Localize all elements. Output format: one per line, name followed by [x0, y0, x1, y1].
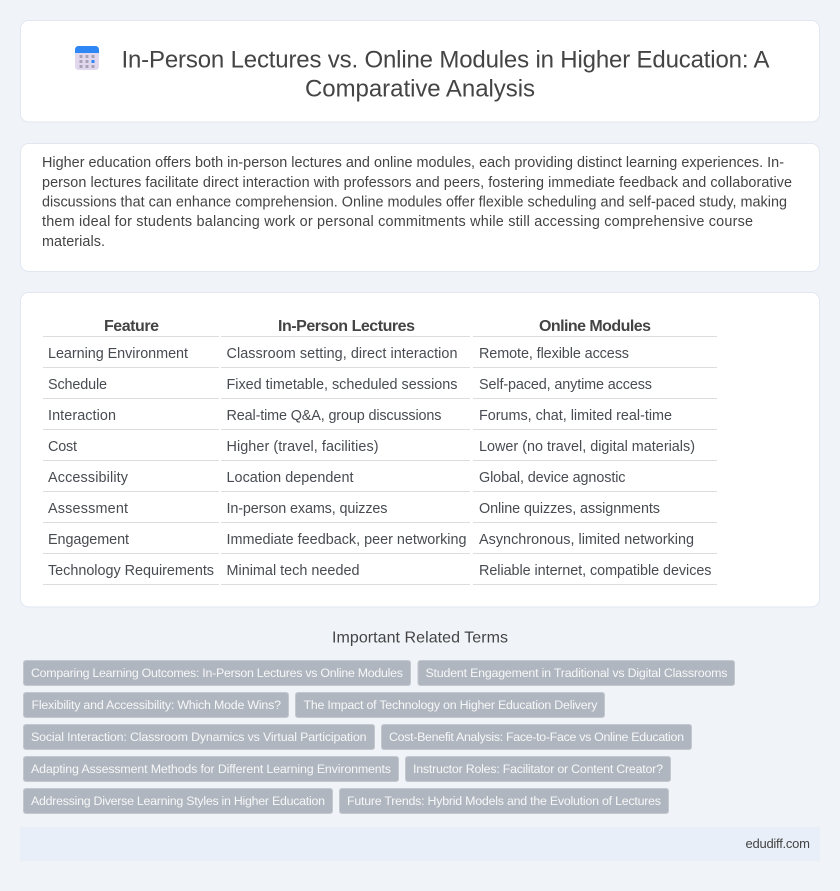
text block: introduction paragraph: Higher education offers both in-person lectures and online modules, each providing distinct learning experiences. In-: [42, 155, 784, 171]
row: technology requirements: Technology Requirements: [48, 563, 214, 579]
row: schedule: Fixed timetable, scheduled sessions: [226, 377, 458, 393]
text block: introduction paragraph: discussions that can enhance comprehension. Online modules offer flexible scheduling and self-paced study, making: [42, 194, 787, 210]
row: interaction: Real-time Q&A, group discussions: [226, 408, 442, 424]
row: schedule: [48, 377, 652, 393]
tag: Student Engagement in Traditional vs Digital Classrooms: [426, 666, 728, 680]
row: technology requirements: Reliable internet, compatible devices: [479, 563, 712, 579]
tag: [24, 692, 288, 718]
row: accessibility: [48, 470, 626, 486]
footer: [20, 827, 820, 861]
row: interaction: Forums, chat, limited real-time: [479, 408, 672, 424]
tag: Cost-Benefit Analysis: Face-to-Face vs Online Education: [389, 730, 684, 744]
row: cost: Higher (travel, facilities): [226, 439, 378, 455]
text block: introduction paragraph: them ideal for students balancing work or personal commitments while still accessing comprehensive course: [42, 214, 753, 230]
tag: Social Interaction: Classroom Dynamics vs Virtual Participation: [31, 730, 367, 744]
text block: introduction paragraph: [42, 155, 792, 250]
row: accessibility: Location dependent: [226, 470, 354, 486]
row: schedule: Self-paced, anytime access: [479, 377, 652, 393]
tag: [24, 788, 332, 814]
footer: edudiff.com: [746, 836, 810, 851]
tag: Future Trends: Hybrid Models and the Evolution of Lectures: [347, 794, 661, 808]
tag: Comparing Learning Outcomes: In-Person Lectures vs Online Modules: [31, 666, 403, 680]
row: learning environment: Classroom setting, direct interaction: [226, 346, 458, 362]
tag: [418, 660, 734, 686]
title: [122, 46, 770, 102]
row: technology requirements: [48, 563, 712, 579]
row: accessibility: Accessibility: [48, 470, 129, 486]
tag: [24, 756, 398, 782]
row: assessment: [48, 501, 660, 517]
row: assessment: In-person exams, quizzes: [226, 501, 388, 517]
row: interaction: Interaction: [48, 408, 116, 424]
icon: calendar: [75, 46, 99, 70]
text block: introduction paragraph: materials.: [42, 234, 105, 250]
row: schedule: Schedule: [48, 377, 107, 393]
tag: [406, 756, 670, 782]
title: Comparative Analysis: [305, 76, 535, 102]
panel: header: [20, 20, 820, 122]
row: cost: Cost: [48, 439, 77, 455]
tag: Adapting Assessment Methods for Different Learning Environments: [31, 762, 391, 776]
tag: Flexibility and Accessibility: Which Mode Wins?: [32, 698, 281, 712]
row: cost: [48, 439, 695, 455]
row: interaction: [48, 408, 672, 424]
row: assessment: Assessment: [48, 501, 128, 517]
table header row: In-Person Lectures: [278, 318, 415, 335]
tag: [340, 788, 668, 814]
row: cost: Lower (no travel, digital materials): [479, 439, 695, 455]
tag: Addressing Diverse Learning Styles in Higher Education: [31, 794, 325, 808]
tag list: related terms: [24, 660, 734, 814]
row: engagement: Asynchronous, limited networking: [479, 532, 694, 548]
tag: Instructor Roles: Facilitator or Content Creator?: [413, 762, 663, 776]
row: learning environment: Remote, flexible access: [479, 346, 629, 362]
row: engagement: Immediate feedback, peer networking: [226, 532, 466, 548]
row: engagement: Engagement: [48, 532, 129, 548]
title: In-Person Lectures vs. Online Modules in Higher Education: A: [122, 46, 770, 74]
row: assessment: Online quizzes, assignments: [479, 501, 660, 517]
row: technology requirements: Minimal tech needed: [226, 563, 360, 579]
tag: [296, 692, 604, 718]
panel: comparison table: [20, 292, 820, 607]
tag: [382, 724, 692, 750]
panel: introduction: [20, 144, 820, 272]
row: engagement: [48, 532, 694, 548]
tag: [24, 724, 374, 750]
row: accessibility: Global, device agnostic: [479, 470, 626, 486]
tag: The Impact of Technology on Higher Education Delivery: [304, 698, 598, 712]
row: learning environment: Learning Environment: [48, 346, 188, 362]
row: learning environment: [48, 346, 629, 362]
text block: introduction paragraph: person lectures facilitate direct interaction with professors and peers, fostering immediate feedback and collaborative: [42, 175, 792, 191]
table header row: Feature: [104, 318, 159, 335]
heading: important related terms: Important Related Terms: [332, 630, 508, 646]
table header row: Online Modules: [539, 318, 651, 335]
table header row: [104, 318, 651, 335]
tag: [24, 660, 410, 686]
